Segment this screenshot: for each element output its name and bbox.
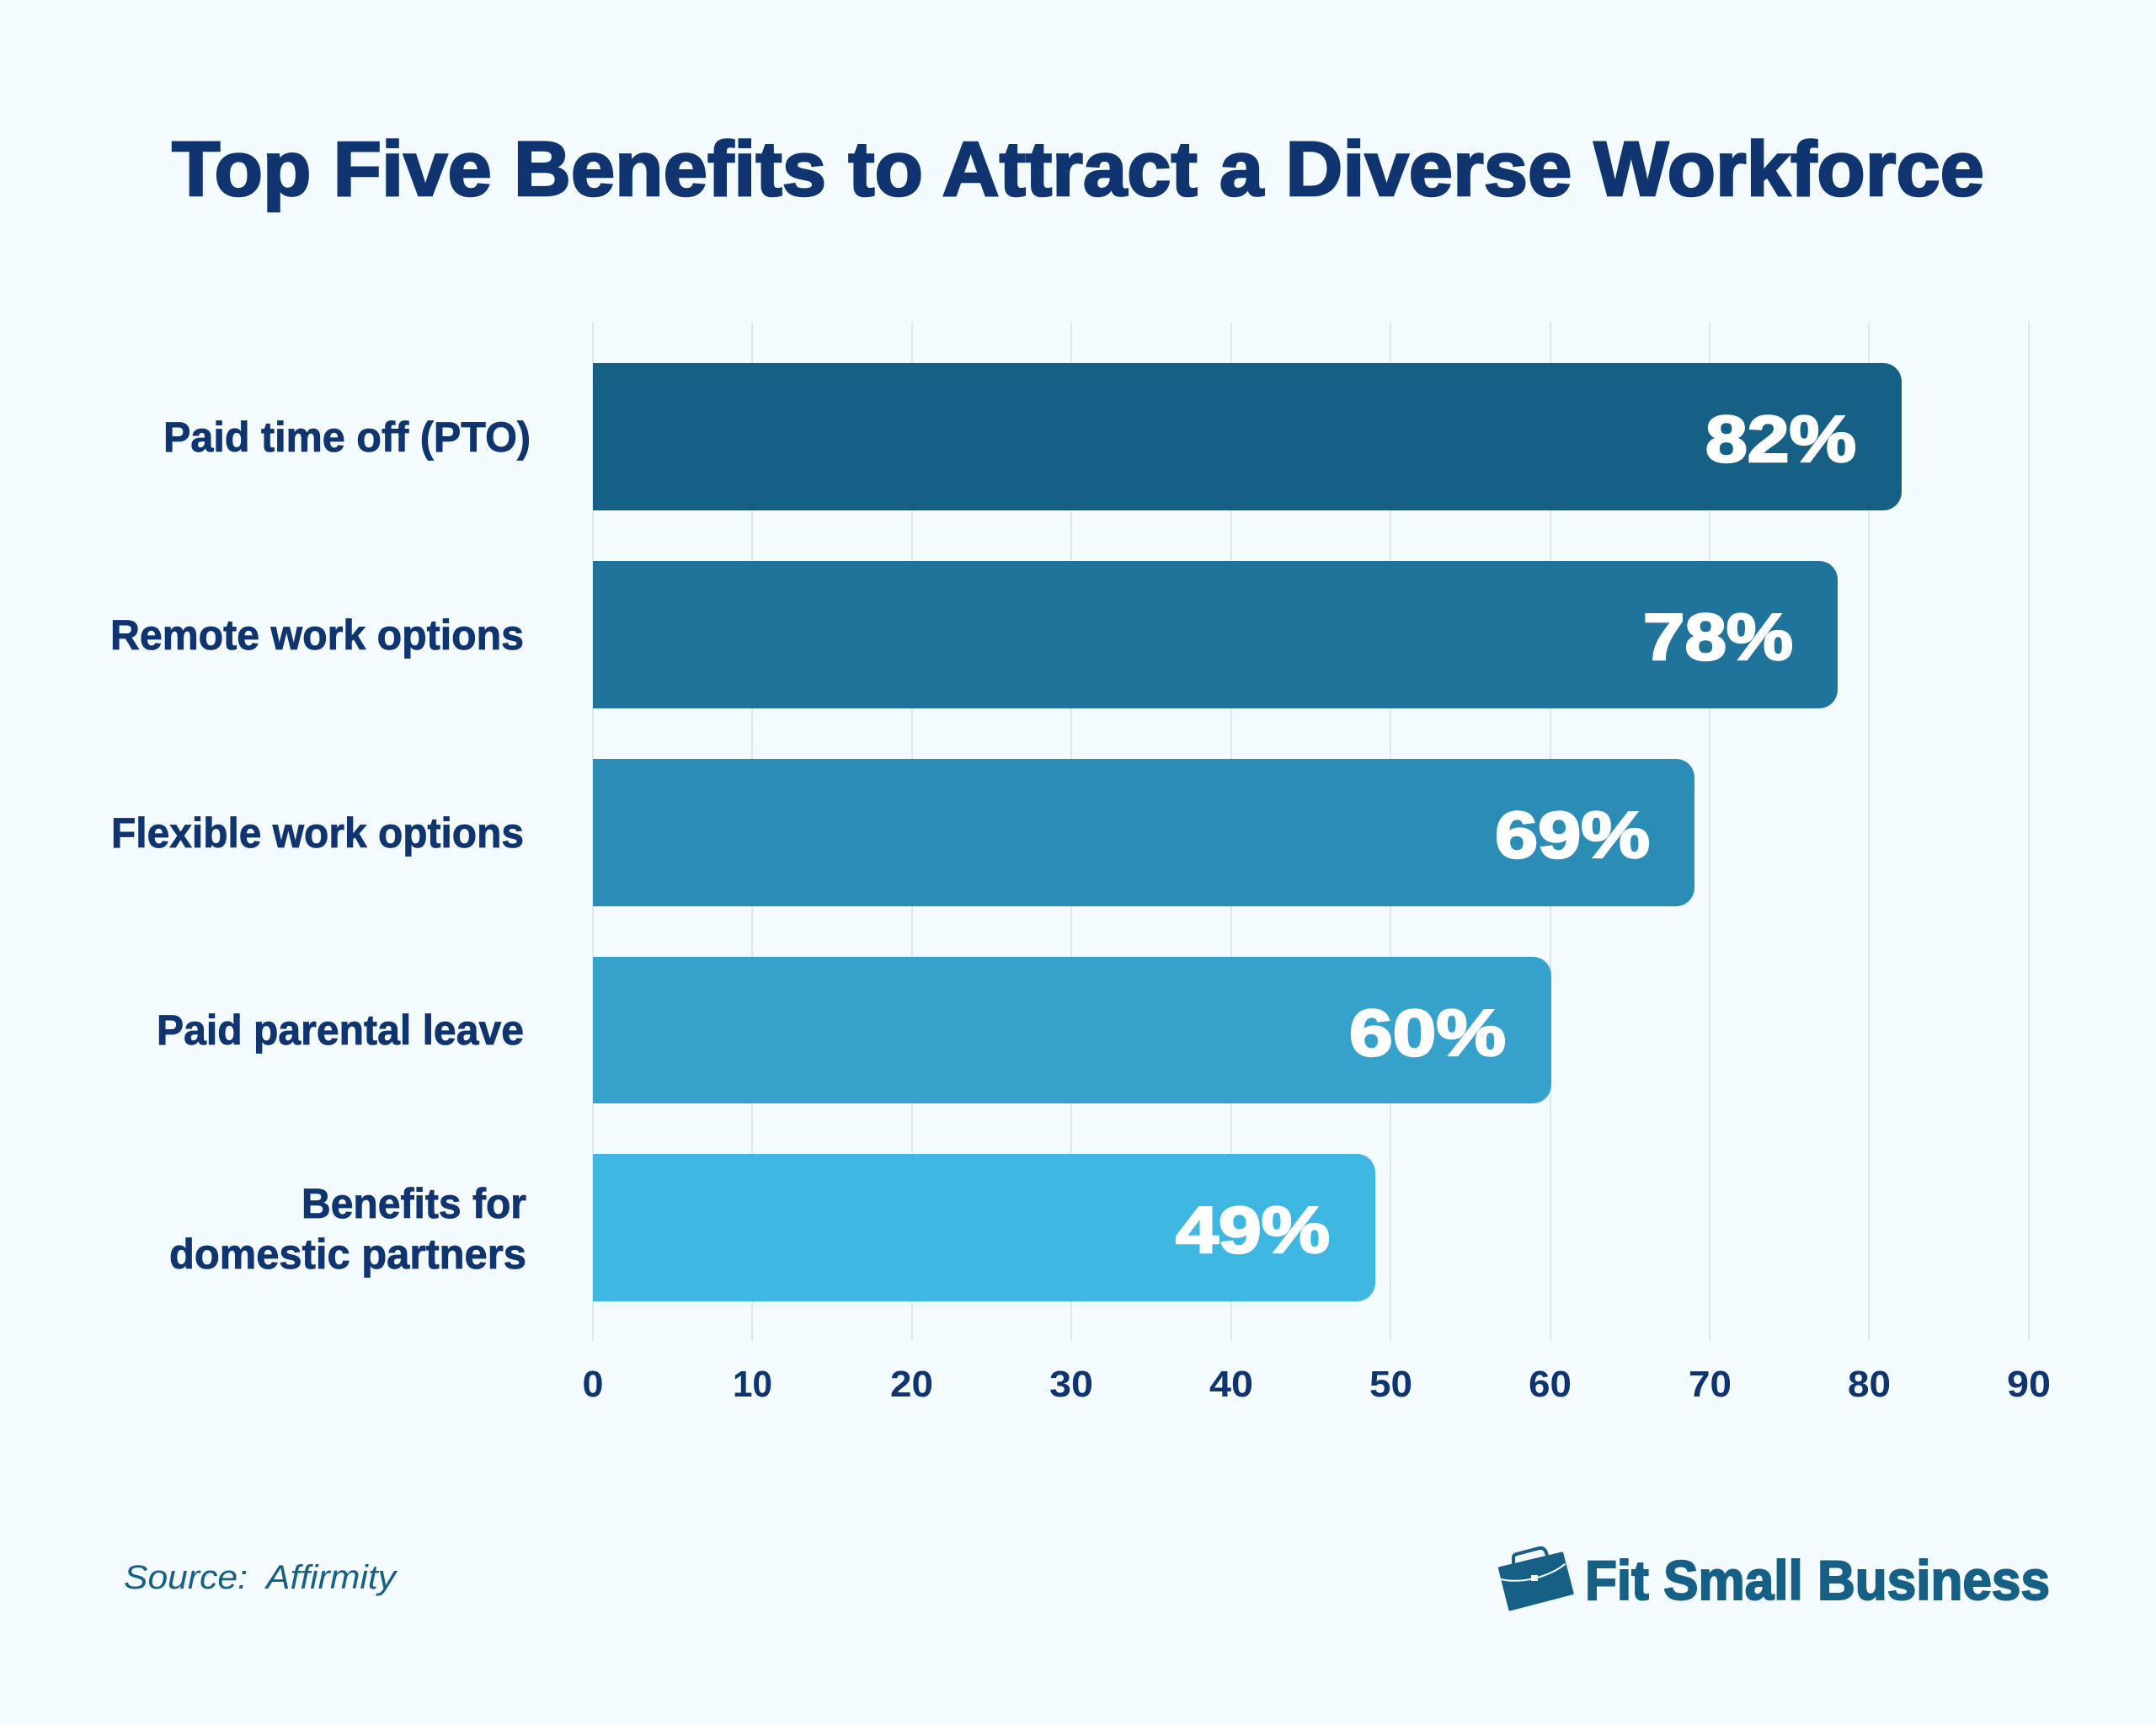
title: Top Five Benefits to Attract a Diverse Workforce	[172, 126, 1984, 212]
bar: benefits for domestic partners 49%	[593, 1154, 1375, 1301]
bar: paid time off 82%: 82%	[1705, 402, 1856, 476]
source note: Source: Affirmity	[124, 1559, 398, 1596]
x axis tick labels: 0	[583, 1364, 603, 1405]
x axis tick labels: 10	[733, 1364, 772, 1405]
x axis tick labels: 30	[1049, 1364, 1093, 1405]
icon: briefcase	[1499, 1548, 1572, 1610]
x axis tick labels: 40	[1209, 1364, 1253, 1405]
bar: benefits for domestic partners 49%: 49%	[1176, 1193, 1330, 1267]
x axis tick labels: 70	[1689, 1364, 1732, 1405]
category labels: Flexible work options	[111, 809, 524, 857]
vertical grid lines	[593, 322, 2029, 1341]
category labels: Paid parental leave	[157, 1007, 524, 1054]
bar: paid parental leave 60%: 60%	[1349, 996, 1506, 1070]
bar: paid time off 82%	[593, 363, 1902, 510]
bar: remote work options 78%	[593, 561, 1838, 708]
x axis tick labels: 90	[2007, 1364, 2051, 1405]
bar: remote work options 78%: 78%	[1643, 600, 1793, 674]
x axis tick labels: 60	[1529, 1364, 1572, 1405]
wordmark: Fit Small Business	[1585, 1549, 2050, 1611]
category labels: domestic partners	[169, 1231, 526, 1278]
category labels: Paid time off (PTO)	[163, 414, 531, 461]
category labels	[110, 414, 531, 1278]
x axis tick labels	[583, 1364, 2051, 1405]
bar: flexible work options 69%	[593, 759, 1694, 906]
category labels: Benefits for	[302, 1180, 526, 1227]
x axis tick labels: 20	[890, 1364, 933, 1405]
bar chart	[110, 322, 2051, 1405]
bar: flexible work options 69%: 69%	[1495, 798, 1650, 872]
category labels: Remote work options	[110, 611, 524, 659]
x axis tick labels: 80	[1848, 1364, 1891, 1405]
bar: paid parental leave 60%	[593, 957, 1551, 1103]
logo: Fit Small Business	[1499, 1548, 2050, 1611]
x axis tick labels: 50	[1369, 1364, 1412, 1405]
